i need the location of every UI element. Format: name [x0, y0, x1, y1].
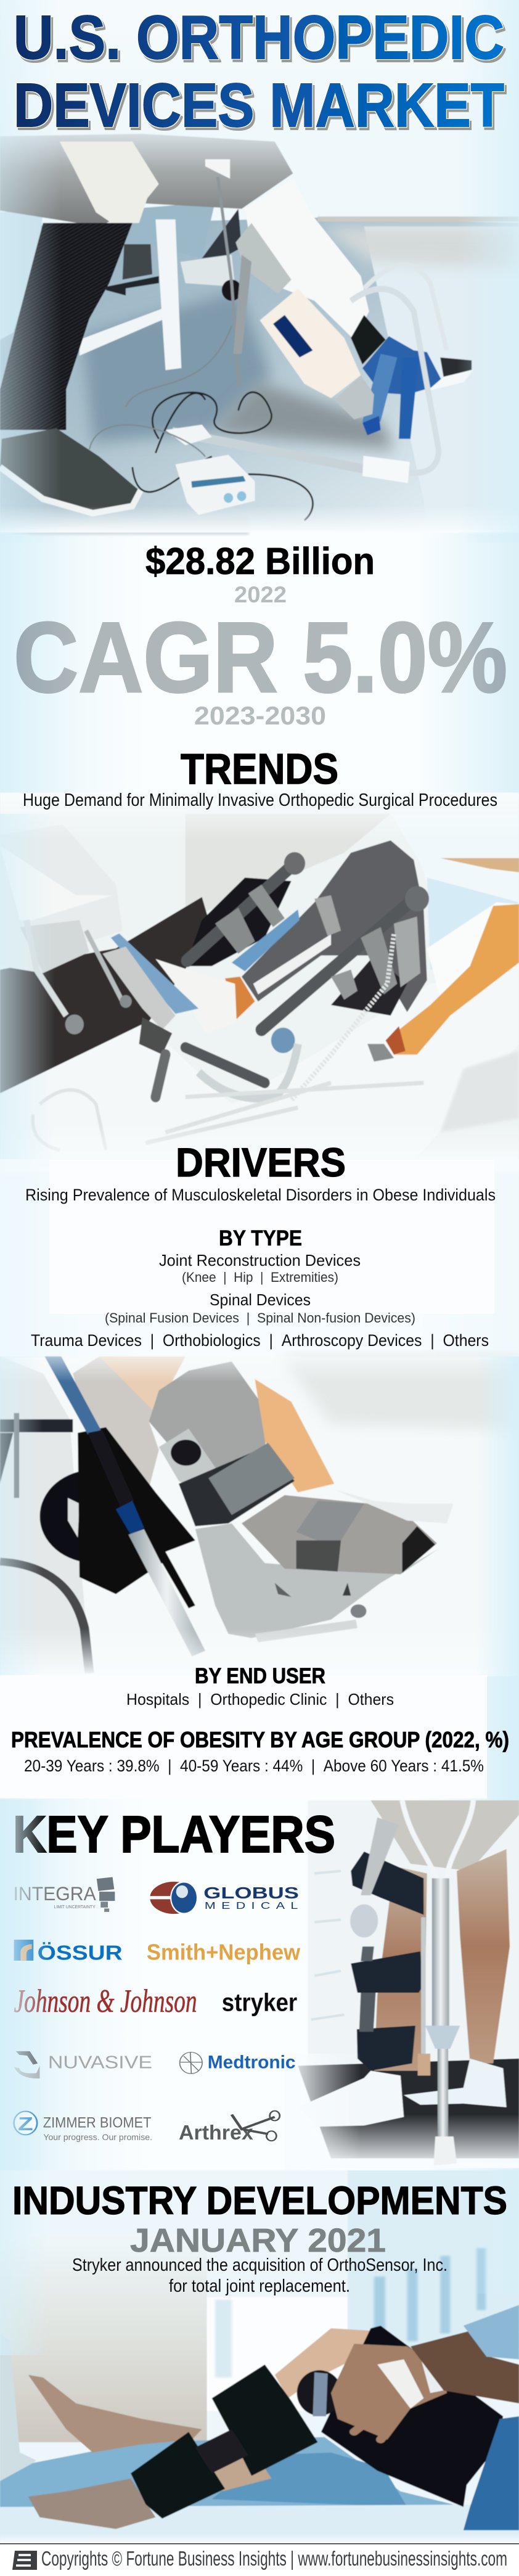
development text: for total joint replacement. — [169, 2276, 350, 2296]
logo: Smith and Nephew: Smith+Nephew — [147, 1940, 300, 1965]
panel: drivers and type backing — [0, 814, 519, 1369]
base year: 2022 — [234, 582, 287, 607]
by type segment: Trauma Devices | Orthobiologics | Arthroscopy Devices | Others — [31, 1331, 489, 1350]
drivers text: Rising Prevalence of Musculoskeletal Disorders in Obese Individuals — [25, 1186, 496, 1204]
photo: leg brace with crutches — [285, 1800, 519, 2175]
logo: Arthrex — [179, 2111, 280, 2144]
forecast period: 2023-2030 — [194, 701, 326, 730]
logo: Globus Medical: GLOBUS — [203, 1884, 299, 1902]
by type segment: BY TYPE — [219, 1226, 302, 1250]
photo: patient on bed with knee brace — [0, 2170, 519, 2545]
logo: NuVasive — [14, 2051, 152, 2078]
photo: seated patient with leg on motion device — [0, 0, 519, 535]
by end user segment: BY END USER — [195, 1664, 325, 1688]
trends heading: TRENDS — [181, 745, 338, 793]
logo: Medtronic — [180, 2052, 296, 2074]
logo: Medtronic: Medtronic — [208, 2052, 296, 2072]
left and right photo vignette — [0, 0, 519, 543]
logo: Johnson and Johnson: Johnson & Johnson — [14, 1982, 197, 2019]
development text — [72, 2255, 447, 2296]
prevalence of obesity by age group — [11, 1727, 509, 1775]
drivers heading: DRIVERS — [176, 1139, 346, 1185]
logo: Integra — [13, 1877, 115, 1912]
logo: Integra: LIMIT UNCERTAINTY — [54, 1904, 96, 1909]
by end user segment — [126, 1664, 394, 1708]
development text: Stryker announced the acquisition of OrthoSensor, Inc. — [72, 2255, 447, 2275]
logo: Zimmer Biomet — [14, 2111, 152, 2142]
by type segment: Joint Reconstruction Devices — [159, 1251, 361, 1270]
key players heading: KEY PLAYERS — [13, 1805, 335, 1863]
by type segment: (Knee | Hip | Extremities) — [182, 1270, 338, 1285]
by type segment — [31, 1226, 489, 1350]
title — [14, 3, 504, 140]
logo: Arthrex: Arthrex — [179, 2122, 253, 2144]
by end user segment: Hospitals | Orthopedic Clinic | Others — [126, 1690, 394, 1708]
logo: Ossur — [14, 1940, 123, 1964]
icon: Fortune Business Insights logo — [12, 2551, 37, 2570]
prevalence of obesity by age group: 20-39 Years : 39.8% | 40-59 Years : 44% | Above 60 Years : 41.5% — [24, 1757, 484, 1775]
by type segment: (Spinal Fusion Devices | Spinal Non-fusion Devices) — [105, 1310, 415, 1326]
footer — [0, 2543, 519, 2576]
by type segment: Spinal Devices — [210, 1290, 311, 1309]
photo: knee machine on hospital bed — [0, 793, 519, 1175]
logo: Globus Medical: MEDICAL — [205, 1900, 298, 1911]
photo: ankle boot on wheelchair — [0, 1356, 519, 1676]
edge vignette for lower photo — [0, 1800, 519, 2355]
logo: Ossur: ÖSSUR — [38, 1942, 123, 1964]
development date: JANUARY 2021 — [130, 2222, 386, 2259]
logo: Zimmer Biomet: ZIMMER BIOMET — [43, 2114, 151, 2131]
panel: end user and prevalence backing — [0, 1356, 519, 1825]
logo: Zimmer Biomet: Your progress. Our promise. — [43, 2132, 152, 2142]
market size value: $28.82 Billion — [145, 540, 375, 582]
logo: Stryker: stryker — [222, 1988, 297, 2016]
logos: key players — [13, 1877, 300, 2144]
logo: Integra: INTEGRA — [13, 1882, 96, 1905]
logo: Globus Medical — [150, 1881, 299, 1914]
logo: NuVasive: NUVASIVE — [48, 2053, 152, 2072]
logo: Zimmer Biomet: Z — [18, 2114, 33, 2135]
